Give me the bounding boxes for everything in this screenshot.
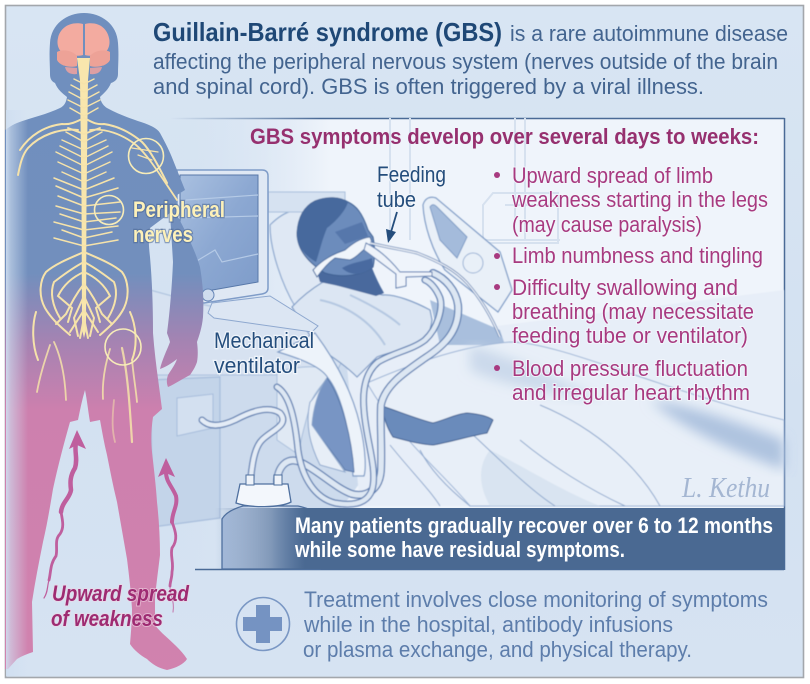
- bullet 4: and irregular heart rhythm: [512, 380, 750, 405]
- blanket: [367, 342, 784, 506]
- wall outlet: [177, 394, 213, 436]
- left edge fade: [6, 110, 29, 676]
- treatment text: [303, 587, 768, 662]
- treatment text: while in the hospital, antibody infusions: [303, 612, 673, 637]
- label: mechanical ventilator: [214, 328, 314, 378]
- patient head: [297, 198, 374, 276]
- label: peripheral nerves: Peripheral: [133, 197, 225, 222]
- label: peripheral nerves: [133, 197, 225, 247]
- bullet 1: Upward spread of limb: [512, 163, 713, 188]
- bullet 3: feeding tube or ventilator): [512, 323, 748, 348]
- intro text: is a rare autoimmune disease: [510, 21, 788, 46]
- label: feeding tube: Feeding: [377, 162, 446, 187]
- treatment text: Treatment involves close monitoring of symptoms: [304, 587, 768, 612]
- bullet 3: breathing (may necessitate: [512, 299, 754, 324]
- patient neck: [317, 264, 384, 296]
- arrow: upward weakness, left: [44, 430, 86, 598]
- blanket shadow behind gown: [430, 300, 505, 345]
- face mask: [313, 237, 373, 277]
- ventilator cabinet: [150, 340, 362, 527]
- icon: ventilator monitor: [177, 170, 318, 332]
- signature: L. Kethu: [681, 472, 770, 504]
- intro text: and spinal cord). GBS is often triggered by a viral illness.: [153, 74, 704, 99]
- arrow: upward weakness, right: [158, 458, 176, 612]
- label: feeding tube: tube: [377, 187, 416, 212]
- label: peripheral nerves: nerves: [133, 222, 193, 247]
- bed side panel: [277, 367, 330, 455]
- bed rail: [278, 333, 365, 476]
- peripheral nerves: [18, 79, 177, 442]
- label: mechanical ventilator: Mechanical: [214, 328, 314, 353]
- upper bed rail: [423, 197, 512, 312]
- pillow: [270, 210, 345, 308]
- intro text: [153, 17, 788, 99]
- Y connector: [364, 243, 432, 288]
- bullet 3: [494, 275, 754, 348]
- banner: recovery message: while some have residual symptoms.: [294, 537, 625, 562]
- figure: human body with nervous system: [5, 13, 203, 676]
- intro text: affecting the peripheral nervous system (nerves outside of the brain: [153, 49, 778, 74]
- illustration: ventilator, bed and patient: [150, 192, 784, 527]
- hoses: [202, 273, 458, 504]
- patient arm: [382, 406, 493, 445]
- bullet 3: Difficulty swallowing and: [512, 275, 738, 300]
- icon: medical cross: [236, 598, 290, 650]
- callout circles: [94, 138, 164, 365]
- bullet 2: Limb numbness and tingling: [512, 243, 763, 268]
- spinal cord: [77, 58, 90, 338]
- mattress and sheet base: [345, 290, 784, 506]
- label: feeding tube: [377, 162, 446, 212]
- symptoms heading: GBS symptoms develop over several days to weeks:: [250, 124, 759, 149]
- bed headboard: [268, 192, 345, 212]
- label: upward spread of weakness: of weakness: [51, 606, 163, 631]
- icon: humidifier canister: [222, 475, 320, 569]
- panel: clinical scene background: [170, 118, 784, 570]
- symptoms list: [494, 163, 768, 405]
- bullet 4: [494, 356, 750, 405]
- patient gown: [292, 282, 432, 377]
- arrow: feeding tube pointer: [386, 212, 397, 243]
- banner: recovery message: [215, 508, 784, 569]
- bullet 1: weakness starting in the legs: [511, 187, 768, 212]
- label: mechanical ventilator: ventilator: [214, 353, 300, 378]
- label: upward spread of weakness: [51, 581, 189, 631]
- bullet 1: (may cause paralysis): [512, 212, 702, 237]
- console under monitor: [150, 290, 350, 375]
- bullet 1: [494, 163, 768, 237]
- brain: [57, 23, 110, 74]
- body silhouette: [5, 13, 203, 670]
- bullet 4: Blood pressure fluctuation: [512, 356, 748, 381]
- label: upward spread of weakness: Upward spread: [52, 581, 189, 606]
- treatment text: or plasma exchange, and physical therapy.: [303, 637, 692, 662]
- feeding tube: [370, 243, 500, 337]
- intro text: Guillain-Barré syndrome (GBS): [153, 17, 502, 47]
